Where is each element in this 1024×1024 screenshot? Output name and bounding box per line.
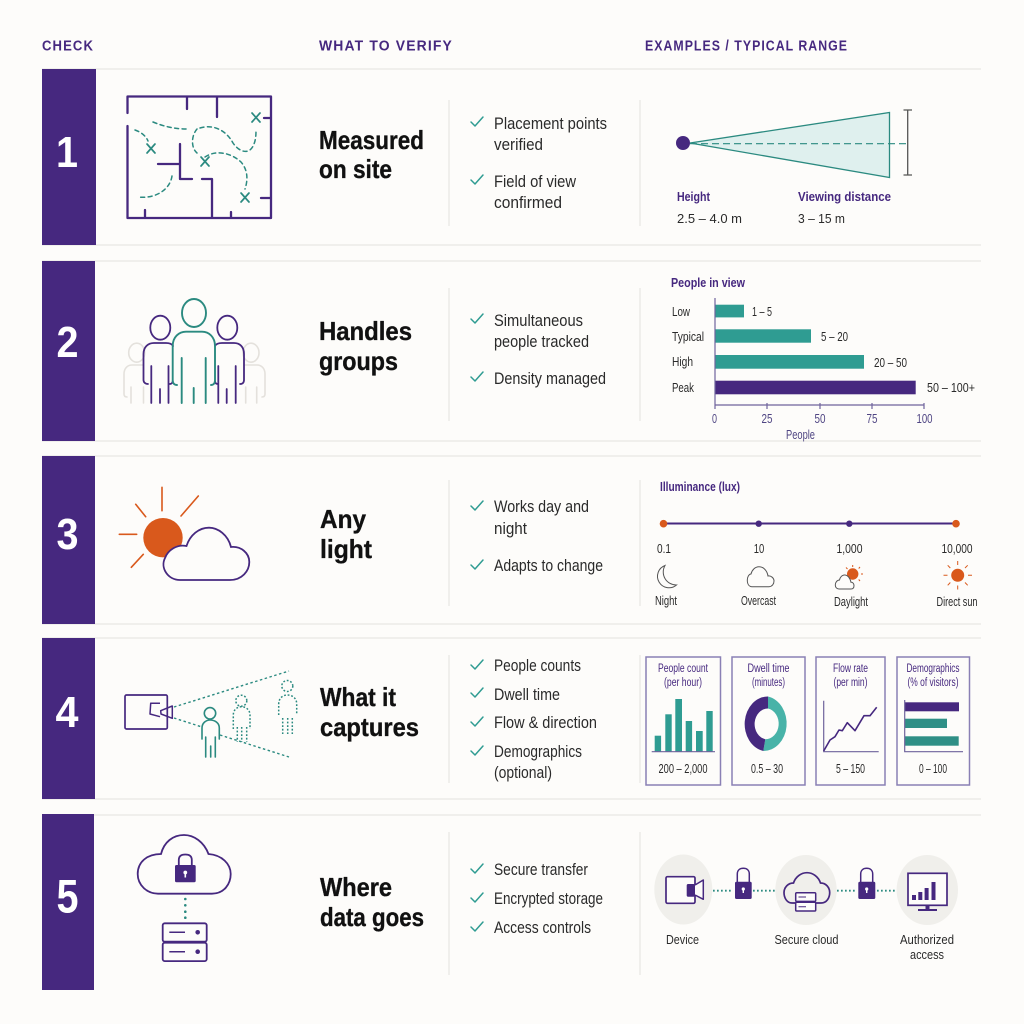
checklist xyxy=(471,657,597,782)
card: dwell time: (minutes) xyxy=(752,677,785,689)
bar chart: people in view xyxy=(671,275,975,442)
heading: groups xyxy=(319,346,398,376)
scale: illuminance: Daylight xyxy=(834,594,868,609)
panel: row 2 handles groups xyxy=(42,261,975,442)
bar chart: people in view: People in view xyxy=(671,275,746,290)
panel: row 1 measured on site xyxy=(42,69,912,245)
scale: illuminance: Night xyxy=(655,593,677,608)
card: flow rate: Flow rate xyxy=(833,663,868,675)
diagram: field of view cone xyxy=(676,110,912,226)
flow diagram: device to access xyxy=(654,854,958,962)
checklist: confirmed xyxy=(494,194,562,212)
heading xyxy=(319,316,412,376)
bar chart: people in view: Low xyxy=(672,304,690,319)
checklist: Placement points xyxy=(494,115,607,133)
heading xyxy=(320,504,372,564)
bar chart: people in view: 5 – 20 xyxy=(821,329,848,344)
checklist: Dwell time xyxy=(494,686,560,704)
scale: illuminance: Overcast xyxy=(741,593,776,608)
heading: Where xyxy=(320,872,392,902)
bar chart: people in view: High xyxy=(672,354,693,369)
column headers: WHAT TO VERIFY xyxy=(319,38,453,54)
card: dwell time xyxy=(732,657,805,785)
card: people count xyxy=(646,657,720,785)
heading: Any xyxy=(320,504,366,534)
diagram: field of view cone: 3 – 15 m xyxy=(798,211,845,226)
checklist: Simultaneous xyxy=(494,312,583,330)
number badge 4: 4 xyxy=(56,688,79,737)
checklist: verified xyxy=(494,136,543,154)
icon: device camera xyxy=(666,877,703,903)
heading: Handles xyxy=(319,316,412,346)
icon: moon xyxy=(658,566,676,588)
flow diagram: device to access: Secure cloud xyxy=(774,932,838,947)
icon: direct sun xyxy=(944,561,972,590)
checklist: Demographics xyxy=(494,743,582,761)
flow diagram: device to access: access xyxy=(910,947,944,962)
card: demographics: (% of visitors) xyxy=(908,677,959,689)
number badge 5: 5 xyxy=(56,870,78,922)
heading: on site xyxy=(319,154,392,184)
icon: daylight xyxy=(835,565,863,589)
card: flow rate: 5 – 150 xyxy=(836,761,865,776)
scale: illuminance: 10,000 xyxy=(942,541,972,556)
scale: illuminance: Illuminance (lux) xyxy=(660,479,740,494)
bar chart: people in view: 1 – 5 xyxy=(752,304,772,319)
checklist: people tracked xyxy=(494,333,589,351)
scale: illuminance xyxy=(655,479,978,609)
number badge 2: 2 xyxy=(56,318,78,367)
number badge 1 xyxy=(42,69,96,245)
icon: overcast cloud xyxy=(747,567,774,587)
card: dwell time: Dwell time xyxy=(748,663,790,675)
checklist xyxy=(471,498,603,575)
card: people count: People count xyxy=(658,663,709,675)
heading: light xyxy=(320,534,372,564)
icon: floor plan with placement points xyxy=(128,96,271,218)
checklist: Density managed xyxy=(494,370,606,388)
flow diagram: device to access: Authorized xyxy=(900,932,954,947)
checklist: Secure transfer xyxy=(494,861,588,879)
scale: illuminance: 10 xyxy=(754,541,764,556)
heading xyxy=(319,125,424,184)
icon: sun and cloud xyxy=(119,487,249,580)
panel: row 5 where data goes xyxy=(42,814,958,990)
heading: What it xyxy=(320,682,396,712)
checklist: Adapts to change xyxy=(494,557,603,575)
icon: monitor with bars xyxy=(908,873,947,911)
number badge 4 xyxy=(42,638,95,799)
bar chart: people in view: 25 xyxy=(762,412,773,426)
card: flow rate: (per min) xyxy=(834,677,868,689)
checklist xyxy=(471,312,606,388)
card: demographics xyxy=(897,657,970,785)
diagram: field of view cone: 2.5 – 4.0 m xyxy=(677,211,742,226)
card: demographics: 0 – 100 xyxy=(919,761,947,776)
heading xyxy=(320,872,424,932)
checklist xyxy=(471,861,603,937)
number badge 3 xyxy=(42,456,95,624)
checklist: Encrypted storage xyxy=(494,890,603,908)
number badge 1: 1 xyxy=(56,128,78,177)
column headers: CHECK xyxy=(42,38,94,54)
icon: camera viewing people xyxy=(125,671,297,757)
icon: lock xyxy=(858,868,875,899)
icon: secure cloud xyxy=(784,873,830,911)
column headers xyxy=(42,38,848,54)
heading: captures xyxy=(320,712,419,742)
diagram: field of view cone: Viewing distance xyxy=(798,189,891,204)
checklist: People counts xyxy=(494,657,581,675)
scale: illuminance: Direct sun xyxy=(936,594,978,609)
panel: row 3 any light xyxy=(42,456,978,624)
bar chart: people in view: 100 xyxy=(916,412,933,426)
bar chart: people in view: 20 – 50 xyxy=(874,355,907,370)
bar chart: people in view: People xyxy=(786,428,815,442)
checklist: Flow & direction xyxy=(494,714,597,732)
card: people count: 200 – 2,000 xyxy=(658,761,708,776)
scale: illuminance: 0.1 xyxy=(657,541,671,556)
bar chart: people in view: 75 xyxy=(866,412,878,426)
icon: secure cloud and server xyxy=(138,835,231,961)
heading: Measured xyxy=(319,125,424,155)
checklist: Field of view xyxy=(494,173,576,191)
heading: data goes xyxy=(320,902,424,932)
checklist: Works day and xyxy=(494,498,589,516)
card: dwell time: 0.5 – 30 xyxy=(751,761,783,776)
heading xyxy=(320,682,419,742)
number badge 2 xyxy=(42,261,95,441)
checklist: (optional) xyxy=(494,764,552,782)
card: people count: (per hour) xyxy=(664,677,702,689)
checklist: Access controls xyxy=(494,919,591,937)
icon: lock xyxy=(735,868,752,899)
bar chart: people in view: Peak xyxy=(672,380,694,395)
scale: illuminance: 1,000 xyxy=(836,541,862,556)
bar chart: people in view: Typical xyxy=(672,329,704,344)
number badge 3: 3 xyxy=(56,510,78,559)
card: demographics: Demographics xyxy=(906,663,960,675)
column headers: EXAMPLES / TYPICAL RANGE xyxy=(645,38,848,54)
card: flow rate xyxy=(816,657,885,785)
flow diagram: device to access: Device xyxy=(666,932,699,947)
bar chart: people in view: 50 – 100+ xyxy=(927,380,975,395)
number badge 5 xyxy=(42,814,94,990)
bar chart: people in view: 50 xyxy=(814,412,826,426)
bar chart: people in view: 0 xyxy=(712,412,717,426)
diagram: field of view cone: Height xyxy=(677,189,711,204)
panel: row 4 what it captures xyxy=(42,638,970,799)
checklist: night xyxy=(494,520,527,538)
icon: group of people xyxy=(124,299,265,403)
checklist xyxy=(471,115,607,212)
